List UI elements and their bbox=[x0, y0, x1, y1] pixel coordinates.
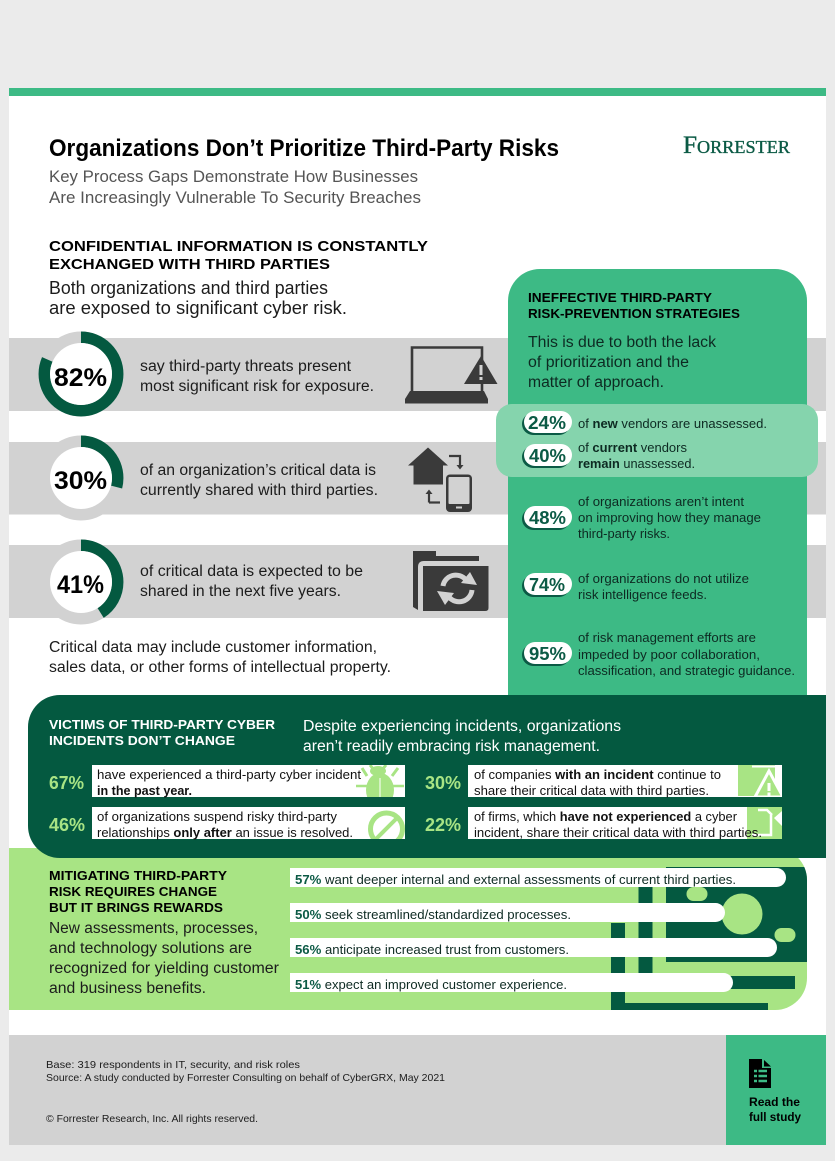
stat band: 82% bbox=[9, 337, 826, 411]
panel intro: New assessments, processes, bbox=[49, 920, 258, 937]
heading: confidential information: EXCHANGED WITH THIRD PARTIES bbox=[49, 256, 330, 273]
panel: victims of cyber incidents bbox=[28, 695, 826, 858]
bar: 57%: 57% want deeper internal and external assessments of current third parties. bbox=[295, 872, 736, 887]
stat band: 30% bbox=[9, 441, 826, 515]
stat: 30%: share their critical data with third parties. bbox=[474, 783, 709, 798]
stat: 95%: impeded by poor collaboration, bbox=[578, 647, 760, 662]
icon: folder sync bbox=[413, 551, 488, 611]
stat: 46%: relationships only after an issue is resolved. bbox=[97, 825, 353, 840]
panel intro bbox=[303, 718, 621, 755]
stat: 67%: 67% bbox=[49, 773, 84, 793]
subtitle bbox=[49, 167, 421, 207]
panel heading bbox=[49, 717, 276, 748]
stat: 22%: 22% bbox=[425, 815, 461, 835]
panel heading: RISK REQUIRES CHANGE bbox=[49, 884, 217, 899]
stat: 24%: of new vendors are unassessed. bbox=[578, 416, 767, 431]
stat: 48%: 48% bbox=[529, 508, 566, 528]
intro text bbox=[49, 278, 347, 318]
panel intro: and business benefits. bbox=[49, 980, 206, 997]
stat: 30%: of companies with an incident continue to bbox=[474, 767, 721, 782]
panel intro: and technology solutions are bbox=[49, 940, 252, 957]
panel intro: Despite experiencing incidents, organizations bbox=[303, 718, 621, 735]
stat: 30% bbox=[425, 765, 783, 798]
panel heading: RISK-PREVENTION STRATEGIES bbox=[528, 306, 740, 321]
stat band: 41% bbox=[9, 545, 826, 619]
bar: 57% bbox=[290, 868, 786, 887]
intro text: are exposed to significant cyber risk. bbox=[49, 298, 347, 318]
bar: 56%: 56% anticipate increased trust from customers. bbox=[295, 942, 569, 957]
panel heading bbox=[49, 868, 227, 915]
highlight panel: vendors bbox=[496, 404, 818, 477]
bar: 50%: 50% seek streamlined/standardized processes. bbox=[295, 907, 571, 922]
bar: 56% bbox=[290, 938, 777, 957]
stat: 95%: of risk management efforts are bbox=[578, 630, 756, 645]
stat text bbox=[140, 358, 374, 395]
stat: 48% bbox=[522, 494, 761, 541]
donut: 82% bbox=[44, 337, 118, 411]
stat: 22% bbox=[425, 807, 782, 840]
stat: 46%: 46% bbox=[49, 815, 85, 835]
stat text: shared in the next five years. bbox=[140, 583, 341, 600]
panel: ineffective strategies bbox=[496, 269, 818, 700]
heading: confidential information: CONFIDENTIAL INFORMATION IS CONSTANTLY bbox=[49, 238, 428, 255]
note: critical data bbox=[49, 639, 391, 676]
stat: 67%: in the past year. bbox=[97, 783, 192, 798]
stat: 95%: 95% bbox=[529, 644, 566, 664]
stat: 30%: 30% bbox=[425, 773, 461, 793]
stat: 24% bbox=[522, 411, 767, 435]
stat: 48%: of organizations aren’t intent bbox=[578, 494, 744, 509]
bar: 51% bbox=[290, 973, 733, 992]
stat: 24%: 24% bbox=[528, 413, 566, 433]
logo: Forrester: FORRESTER bbox=[683, 132, 790, 159]
donut: 82%: 82% bbox=[54, 364, 107, 392]
copyright: © Forrester Research, Inc. All rights reserved. bbox=[46, 1114, 258, 1125]
stat: 95% bbox=[522, 630, 795, 678]
decorative circuit shapes bbox=[611, 867, 807, 1010]
button: read the full study bbox=[726, 1035, 826, 1145]
panel heading: BUT IT BRINGS REWARDS bbox=[49, 900, 223, 915]
donut: 30%: 30% bbox=[54, 467, 107, 495]
stat: 46% bbox=[49, 807, 405, 840]
icon: house and phone exchange bbox=[408, 448, 472, 512]
stat text bbox=[140, 563, 363, 600]
stat: 22%: incident, share their critical data with third parties. bbox=[474, 825, 762, 840]
heading: confidential information bbox=[49, 238, 428, 273]
bar: 51%: 51% expect an improved customer experience. bbox=[295, 977, 567, 992]
stat text: currently shared with third parties. bbox=[140, 482, 378, 499]
panel intro: matter of approach. bbox=[528, 374, 664, 391]
panel: mitigating risk bbox=[9, 848, 807, 1010]
stat: 40%: 40% bbox=[529, 446, 566, 466]
stat: 40%: of current vendors bbox=[578, 440, 687, 455]
panel intro bbox=[49, 920, 279, 997]
note: critical data: Critical data may include customer information, bbox=[49, 639, 377, 656]
intro text: Both organizations and third parties bbox=[49, 278, 328, 298]
stat: 48%: third-party risks. bbox=[578, 526, 670, 541]
icon: laptop warning bbox=[405, 348, 498, 404]
stat: 74%: of organizations do not utilize bbox=[578, 571, 749, 586]
panel intro: aren’t readily embracing risk management. bbox=[303, 738, 600, 755]
source notes: Base: 319 respondents in IT, security, and risk roles bbox=[46, 1060, 300, 1071]
panel intro: of prioritization and the bbox=[528, 354, 689, 371]
panel heading: INEFFECTIVE THIRD-PARTY bbox=[528, 290, 712, 305]
stat: 74%: 74% bbox=[529, 575, 565, 595]
stat text bbox=[140, 462, 378, 499]
footer bbox=[9, 1035, 826, 1145]
stat: 46%: of organizations suspend risky third-party bbox=[97, 809, 338, 824]
panel heading: INCIDENTS DON’T CHANGE bbox=[49, 733, 235, 748]
source notes: Source: A study conducted by Forrester Consulting on behalf of CyberGRX, May 2021 bbox=[46, 1073, 445, 1084]
stat: 40%: remain unassessed. bbox=[578, 456, 695, 471]
subtitle: Key Process Gaps Demonstrate How Businesses bbox=[49, 167, 418, 186]
button: read the full study: Read the bbox=[749, 1097, 800, 1109]
stat text: say third-party threats present bbox=[140, 358, 352, 375]
stat: 48%: on improving how they manage bbox=[578, 510, 761, 525]
stat: 40% bbox=[522, 440, 695, 471]
stat: 67% bbox=[50, 765, 405, 798]
panel intro bbox=[528, 334, 716, 391]
panel heading: VICTIMS OF THIRD-PARTY CYBER bbox=[49, 717, 276, 732]
donut: 41%: 41% bbox=[57, 571, 104, 599]
button: read the full study: full study bbox=[749, 1112, 802, 1124]
stat text: of critical data is expected to be bbox=[140, 563, 363, 580]
panel heading bbox=[528, 290, 740, 321]
stat: 95%: classification, and strategic guidance. bbox=[578, 663, 795, 678]
panel heading: MITIGATING THIRD-PARTY bbox=[49, 868, 227, 883]
panel intro: recognized for yielding customer bbox=[49, 960, 279, 977]
source notes bbox=[46, 1060, 445, 1084]
donut: 30% bbox=[44, 441, 118, 515]
stat: 74% bbox=[522, 571, 749, 602]
stat: 74%: risk intelligence feeds. bbox=[578, 587, 707, 602]
panel intro: This is due to both the lack bbox=[528, 334, 716, 351]
icon: document bbox=[749, 1059, 771, 1088]
note: critical data: sales data, or other forms of intellectual property. bbox=[49, 659, 391, 676]
bar: 50% bbox=[290, 903, 725, 922]
donut: 41% bbox=[44, 545, 118, 619]
stat: 22%: of firms, which have not experienced a cyber bbox=[474, 809, 738, 824]
stat text: most significant risk for exposure. bbox=[140, 378, 374, 395]
stat text: of an organization’s critical data is bbox=[140, 462, 376, 479]
subtitle: Are Increasingly Vulnerable To Security Breaches bbox=[49, 188, 421, 207]
title: Organizations Don’t Prioritize Third-Party Risks bbox=[49, 135, 559, 162]
stat: 67%: have experienced a third-party cyber incident bbox=[97, 767, 361, 782]
